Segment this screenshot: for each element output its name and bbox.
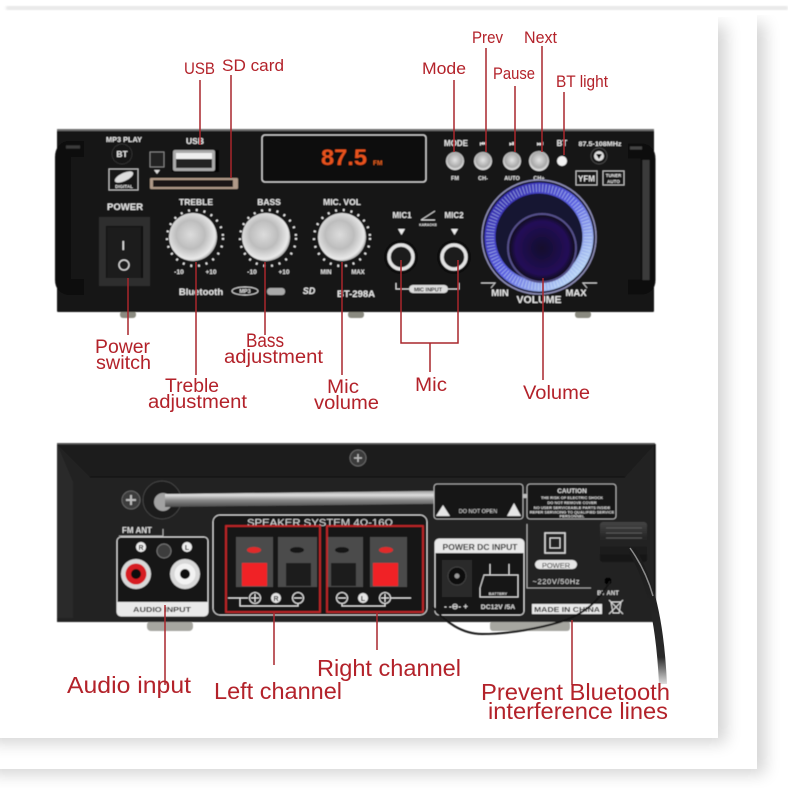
FM antenna — [119, 481, 551, 536]
speaker terminal panel: L — [361, 596, 366, 603]
control buttons: CH- — [478, 176, 488, 182]
control buttons: 87.5-108MHz — [578, 142, 622, 148]
audio input block: R — [138, 545, 144, 552]
white RCA jack — [170, 559, 200, 589]
terminal: right positive — [236, 537, 273, 587]
mic volume knob: MIC. VOL — [323, 197, 361, 207]
FM antenna: FM ANT — [122, 526, 152, 535]
control buttons: AUTO — [607, 179, 620, 184]
illuminated volume knob: MIN — [491, 288, 509, 299]
control buttons: BT — [557, 139, 567, 148]
control buttons — [444, 139, 624, 185]
brand strip: SD — [303, 286, 316, 296]
rear panel of the amplifier — [57, 443, 655, 634]
mic inputs: MIC1 — [392, 211, 412, 220]
illuminated volume knob: MAX — [565, 288, 587, 299]
line: interference wire — [571, 620, 573, 685]
speaker terminal panel: R — [273, 596, 279, 603]
label: Bass adjustment — [224, 331, 324, 368]
audio input block — [117, 537, 208, 616]
power DC input block: BATTERY — [489, 591, 508, 596]
line: Prev — [485, 48, 487, 152]
label: Power switch: switch — [96, 353, 151, 374]
label: Mic: Mic — [415, 375, 447, 396]
control buttons: YFM — [578, 174, 595, 184]
caution labels: CAUTION — [557, 488, 587, 495]
power switch: POWER — [107, 202, 143, 213]
illuminated volume knob — [481, 180, 597, 306]
label: Power switch: Power — [95, 337, 151, 358]
bass knob: BASS — [257, 197, 281, 207]
top-left logos: BT — [116, 149, 128, 159]
caution labels: NO USER SERVICEABLE PARTS INSIDE — [534, 505, 611, 510]
line: power switch — [127, 278, 129, 335]
terminal: left positive — [370, 537, 407, 587]
brand strip: MP3 — [239, 289, 251, 295]
control buttons: CH+ — [533, 176, 545, 182]
red RCA jack — [121, 559, 151, 589]
line: mic volume — [341, 262, 343, 375]
label: Prevent Bluetooth interference lines — [481, 679, 670, 724]
label: Left channel: Left channel — [214, 678, 342, 704]
chassis — [57, 129, 654, 312]
FM display: FM — [373, 160, 382, 167]
power DC input block: POWER DC INPUT — [442, 542, 518, 552]
caution labels — [434, 484, 616, 519]
top-left logos: DIGITAL — [115, 184, 133, 189]
label: Treble adjustment: adjustment — [148, 392, 248, 413]
label: Prevent Bluetooth interference lines: Prevent Bluetooth — [481, 679, 670, 705]
rear chassis — [57, 444, 655, 622]
rear feet — [147, 621, 570, 631]
label: SD card: SD card — [222, 56, 284, 75]
power DC input block: DC12V /5A — [481, 604, 515, 611]
right handle — [628, 148, 648, 287]
label: Mode: Mode — [422, 59, 466, 78]
line: SD card — [230, 75, 232, 178]
terminal: right negative — [278, 537, 317, 587]
label: USB: USB — [184, 59, 215, 78]
mic volume knob — [314, 197, 370, 276]
label: BT light: BT light — [556, 72, 608, 91]
label: Volume: Volume — [523, 383, 590, 404]
mains power markings: BT ANT — [597, 591, 619, 597]
speaker terminal panel — [213, 515, 427, 615]
mic volume knob: MIN — [320, 270, 332, 276]
line: bass — [264, 262, 266, 335]
label: Mic volume: Mic — [327, 377, 359, 398]
line: Mode — [453, 80, 455, 152]
power DC input block: - -⊖- + — [444, 602, 468, 611]
mic inputs: MIC2 — [444, 211, 464, 220]
control buttons: FM — [451, 176, 459, 182]
top-left logos — [106, 135, 142, 190]
terminal polarity marks — [228, 592, 411, 606]
mains power markings — [527, 524, 623, 614]
control buttons: ⏭ — [537, 141, 544, 148]
mic inputs: MIC INPUT — [414, 288, 443, 294]
label: Treble adjustment — [148, 376, 248, 413]
caution labels: PERSONNEL — [560, 514, 585, 518]
control buttons: ⏮ — [480, 141, 487, 148]
mains power markings: POWER — [542, 561, 571, 570]
audio input block: AUDIO INPUT — [133, 605, 191, 614]
control buttons: TUNER — [606, 173, 622, 178]
line: Next — [541, 46, 543, 152]
left channel red frame — [226, 526, 320, 612]
mic inputs — [384, 211, 471, 294]
callout labels — [67, 28, 670, 724]
top-left logos: MP3 PLAY — [106, 135, 142, 144]
audio input block: L — [185, 545, 190, 552]
label: Prev: Prev — [472, 28, 503, 47]
USB port and SD slot — [150, 136, 238, 189]
label: Bass adjustment: adjustment — [224, 347, 324, 368]
bluetooth interference wire — [433, 581, 610, 634]
mic inputs: KARAOKE — [419, 223, 438, 227]
line: right channel — [376, 612, 378, 650]
treble knob: +10 — [205, 269, 217, 276]
caution labels: DO NOT REMOVE COVER — [547, 500, 597, 505]
bass knob: -10 — [247, 269, 257, 276]
control buttons: MODE — [444, 139, 469, 148]
label: Audio input: Audio input — [67, 672, 192, 698]
brand strip: BT-298A — [337, 289, 375, 300]
FM display — [262, 135, 426, 182]
terminal: left negative — [327, 537, 363, 587]
label: Pause: Pause — [493, 64, 535, 83]
label: Next: Next — [524, 28, 557, 47]
line: volume — [542, 278, 544, 380]
line: audio input — [164, 605, 166, 685]
power DC input block — [435, 539, 524, 615]
brand strip: Bluetooth — [179, 287, 223, 298]
label: Bass adjustment: Bass — [246, 331, 284, 352]
label: Mic volume: volume — [314, 393, 379, 414]
caution labels: THE RISK OF ELECTRIC SHOCK — [541, 495, 603, 500]
label: Prevent Bluetooth interference lines: interference lines — [488, 698, 668, 724]
label: Right channel: Right channel — [317, 655, 461, 681]
caution labels: DO NOT OPEN — [459, 509, 497, 515]
mains power markings: MADE IN CHINA — [534, 605, 601, 614]
left handle — [60, 147, 84, 287]
callout lines — [128, 46, 572, 685]
bass knob — [240, 197, 296, 276]
line: BT light — [563, 92, 565, 155]
front feet — [120, 311, 591, 318]
front panel of the amplifier — [57, 129, 654, 318]
treble knob: -10 — [174, 269, 184, 276]
mic volume knob: MAX — [351, 270, 365, 276]
illuminated volume knob: VOLUME — [517, 294, 561, 306]
treble knob: TREBLE — [179, 197, 213, 207]
USB port and SD slot: USB — [186, 136, 204, 146]
FM display: 87.5 — [321, 145, 367, 170]
mains plug — [600, 522, 647, 562]
bass knob: +10 — [278, 269, 290, 276]
label: Mic volume — [314, 377, 379, 414]
rear top screw — [350, 450, 366, 466]
mains cable — [630, 548, 663, 684]
label: Power switch — [95, 337, 151, 374]
treble knob — [167, 197, 223, 276]
label: Treble adjustment: Treble — [165, 376, 219, 397]
mains power markings: ~220V/50Hz — [532, 577, 580, 586]
brand strip — [179, 286, 375, 300]
line: mic — [401, 260, 458, 372]
line: treble — [195, 262, 197, 375]
line: USB — [199, 80, 201, 145]
control buttons: ⏯ — [509, 141, 515, 148]
line: left channel — [273, 612, 275, 665]
control buttons: AUTO — [504, 176, 520, 182]
caution labels: REFER SERVICING TO QUALIFIED SERVICE — [530, 510, 615, 514]
right channel red frame — [327, 526, 423, 612]
speaker terminal panel: SPEAKER SYSTEM 4Ω-16Ω — [247, 517, 393, 529]
power switch — [99, 202, 150, 286]
line: Pause — [514, 86, 516, 152]
